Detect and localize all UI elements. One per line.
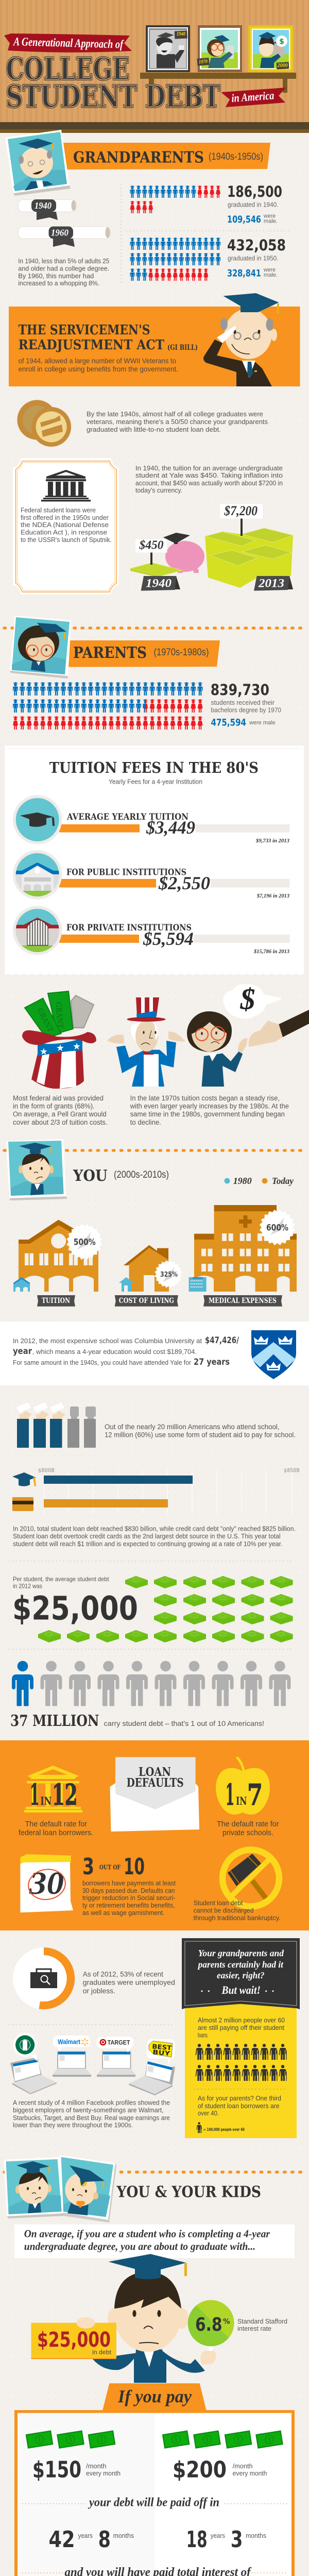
picture frame: 1940: 1940 — [177, 31, 185, 37]
illustration: grants in top hat — [22, 991, 96, 1089]
text: yale tuition: account, that $450 was actually worth about $7200 in — [135, 480, 283, 487]
legend: elder icon: = 100,000 people over 60 — [203, 2127, 245, 2132]
building: medical expenses: 600% — [266, 1223, 288, 1233]
icon: piggy bank with cap — [163, 533, 204, 573]
row: for private institutions: FOR PRIVATE INSTITUTIONS — [66, 923, 192, 933]
label: 1940 — [141, 576, 180, 591]
callout: on average: On average, if you are a student who is completing a 4-year — [24, 2228, 270, 2240]
text: student aid: Out of the nearly 20 million Americans who attend school, — [105, 1423, 280, 1431]
logo: target: TARGET — [108, 2039, 130, 2046]
text: college degree share: By 1960, this number had — [18, 273, 94, 280]
icon: no gavel bankruptcy: Student loan debt — [194, 1900, 243, 1907]
stat: 186,500: 186,500 — [227, 183, 282, 200]
building: tuition: 500% — [74, 1238, 96, 1248]
stat: 432,058: male. — [264, 272, 278, 278]
money stack: 2013: $7,200 — [224, 503, 258, 518]
stat: 1 in 12 federal: IN — [40, 1794, 52, 1807]
icon: credit card — [12, 1497, 33, 1511]
stat: 3 out of 10: OUT OF — [99, 1864, 121, 1871]
heading banner: (1940s-1950s) — [209, 151, 263, 162]
illustration: uncle sam — [107, 997, 185, 1087]
title: COLLEGE — [6, 52, 130, 87]
legend: 1980 — [233, 1176, 252, 1186]
text: ndea: first offered in the 1950s under — [21, 514, 109, 521]
panel: but wait callout — [182, 1938, 300, 2138]
bar chart: student debt vs credit cards: $850B — [284, 1467, 300, 1474]
panel: servicemen's readjustment act — [9, 293, 300, 386]
stat: 432,058: were — [263, 267, 276, 273]
text: yale tuition: In 1940, the tuition for an average undergraduate — [135, 465, 283, 472]
text: college degree share: increased to a whopping 8%. — [18, 280, 99, 287]
stat: 186,500: graduated in 1940. — [228, 201, 278, 208]
text: veterans — [87, 410, 268, 433]
stat: 1 in 12 federal: federal loan borrowers. — [19, 1828, 93, 1837]
label: 2013 — [254, 576, 293, 591]
illustration: raised hands with envelopes — [16, 1402, 96, 1448]
banner: a generational approach of: A Generational Approach of — [12, 35, 124, 51]
text: unemployed graduates: or jobless. — [83, 1987, 115, 1995]
building: cost of living — [119, 1245, 182, 1292]
money stack: 2013 — [205, 503, 293, 588]
text: biggest employers: lower than they were throughout the 1900s. — [13, 2121, 133, 2129]
text: certainly had it easier: easier, right? — [217, 1970, 265, 1980]
logo: best buy — [147, 2039, 175, 2066]
banner: in america — [221, 88, 286, 107]
stat: 839,730: students received their — [211, 699, 274, 706]
photo: you — [4, 2157, 64, 2218]
icon: briefcase — [30, 1969, 57, 1988]
text: unemployed graduates: graduates were unemployed — [83, 1978, 175, 1987]
heading — [49, 759, 259, 785]
illustration: worried parent with thought bubble — [187, 982, 309, 1087]
text: parents over 40: over 40. — [198, 2109, 219, 2117]
illustration: grants in top hat: ★ — [40, 1046, 48, 1057]
text: college degree share: In 1940, less than 5% of adults 25 — [18, 258, 109, 265]
logo: best buy: BEST — [152, 2043, 173, 2052]
heading: Yearly Fees for a 4-year Institution — [109, 778, 202, 785]
banner: in america: in America — [231, 89, 274, 105]
stat: 3 out of 10: 30 days passed due. Defaults can — [82, 1887, 175, 1894]
stat: average debt $25,000: $25,000 — [12, 1590, 138, 1627]
text: yale tuition: student at Yale was $450. Taking inflation into — [135, 472, 283, 479]
stat: 37 million: 37 MILLION — [10, 1712, 99, 1730]
stat: 839,730: bachelors degree by 1970 — [211, 707, 281, 714]
stat: 1 in 7 private: IN — [236, 1794, 247, 1807]
scroll: 1940 — [18, 199, 76, 220]
heading: YOU & YOUR KIDS — [116, 2183, 261, 2201]
photo: baby — [59, 2155, 116, 2223]
text: total student debt: Student loan debt overtook credit cards as the 2nd largest debt source in the U.S. This year total — [13, 1533, 281, 1540]
text: of 1944 — [19, 357, 178, 373]
panel: repayment comparison — [14, 2410, 295, 2576]
row: for public institutions: $7,196 in 2013 — [256, 893, 289, 899]
text: certainly had it easier — [197, 1948, 284, 1996]
icon: no gavel bankruptcy: through traditional bankruptcy. — [194, 1914, 281, 1922]
text: tuition rise — [130, 1094, 289, 1126]
laptop 4 — [129, 2060, 175, 2095]
stat: 18 years 3 months: years — [211, 2532, 225, 2539]
text: of 1944: enroll in college using benefits from the government. — [19, 365, 178, 373]
text: certainly had it easier: parents certainly had it — [197, 1959, 284, 1970]
stat: 3 out of 10: borrowers have payments at least — [82, 1879, 176, 1887]
pictogram: 1970 graduates — [13, 682, 203, 730]
text: biggest employers: Starbucks, Target, and Best Buy. Real wage earnings are — [13, 2114, 170, 2122]
paddle: 6.8% — [188, 2300, 234, 2365]
thought bubble: $ — [240, 982, 255, 1016]
stat: $150 per month: every month — [86, 2469, 121, 2477]
logo: walmart: Walmart — [58, 2038, 81, 2045]
stat: $150 per month: /month — [86, 2462, 107, 2470]
text: student aid: 12 million (60%) use some form of student aid to pay for school. — [105, 1431, 296, 1439]
building: cost of living: 325% — [160, 1271, 178, 1279]
label: 1940: 1940 — [146, 577, 172, 590]
text: people over 60: are still paying off their student — [198, 2024, 284, 2031]
panel: columbia university — [0, 1321, 309, 1385]
label: cost of living — [115, 1295, 178, 1307]
row: for private institutions: $15,786 in 2013 — [253, 949, 289, 955]
stat: 839,730: 475,594 — [211, 717, 246, 728]
text: total student debt: In 2010, total student loan debt reached $830 billion, while credit card debt "only" reached $825 billion. — [13, 1526, 296, 1533]
text: biggest employers: biggest employers of twenty-somethings are Walmart, — [13, 2106, 164, 2114]
illustration: saluting grandfather — [203, 293, 279, 386]
heading — [73, 1167, 169, 1185]
legend: Today — [272, 1176, 294, 1186]
illustration: employers and laptops — [10, 2033, 175, 2095]
logo: best buy: BUY — [152, 2048, 170, 2057]
picture frame: 2000: 2000 — [277, 63, 288, 69]
icon: no gavel bankruptcy: cannot be discharged — [194, 1907, 254, 1914]
stat: average debt $25,000: Per student, the average student debt — [13, 1575, 109, 1583]
heading: READJUSTMENT ACT — [19, 337, 165, 353]
text: federal aid: in the form of grants (68%). — [13, 1103, 95, 1110]
row: average yearly tuition — [13, 795, 290, 844]
picture frame: 2000: $ — [279, 38, 284, 46]
text: of 1944: of 1944, allowed a large number of WWII Veterans to — [19, 357, 176, 365]
text: tuition rise: with even larger yearly increases by the 1980s. At the — [130, 1103, 289, 1110]
panel: header — [0, 0, 309, 133]
picture frame: 1970 — [197, 25, 242, 72]
pictogram: 1950 graduates — [130, 238, 220, 281]
illustration: grants in top hat: GRANT — [54, 1002, 65, 1029]
title — [6, 52, 220, 114]
text: yale tuition — [135, 465, 283, 494]
photo: you — [6, 1139, 67, 1200]
legend — [225, 1176, 294, 1186]
stat: 1 in 7 private: 1 — [226, 1778, 234, 1812]
paddle: 6.8%: % — [223, 2317, 230, 2326]
stat: 1 in 7 private: 7 — [247, 1778, 263, 1812]
heading: (2000s-2010s) — [114, 1170, 169, 1180]
row: for public institutions: FOR PUBLIC INSTITUTIONS — [66, 867, 186, 877]
text: veterans: graduated with little-to-no student loan debt. — [87, 426, 221, 433]
text: ndea: Federal student loans were — [21, 507, 96, 514]
row: average yearly tuition: $9,733 in 2013 — [255, 838, 289, 844]
money stack: 1940: $450 — [139, 539, 164, 552]
icon: no gavel bankruptcy — [194, 1850, 281, 1922]
heading banner: PARENTS — [73, 644, 147, 662]
icon: broken credit card coins — [17, 400, 71, 447]
stat: $150 per month: $150 — [32, 2456, 81, 2483]
row: average yearly tuition: $3,449 — [146, 817, 195, 838]
icon: temple — [41, 470, 91, 502]
picture frame: 2000 — [248, 25, 294, 72]
logo: walmart — [53, 2036, 90, 2052]
text: biggest employers — [13, 2099, 170, 2129]
text: parents over 40: As for your parents? One third — [198, 2094, 281, 2102]
heading banner — [63, 143, 270, 170]
sign: $25,000 in debt — [31, 2317, 116, 2359]
illustration: grants in top hat: ★ — [56, 1043, 64, 1054]
stat: 432,058 — [227, 236, 286, 279]
stat: 1 in 7 private: private schools. — [222, 1828, 273, 1837]
chart: 53% donut unemployed — [13, 1947, 75, 2009]
building: medical expenses — [189, 1205, 297, 1292]
heading: THE SERVICEMEN'S — [19, 323, 150, 338]
stat: 3 out of 10: 3 — [82, 1854, 94, 1880]
text: student aid — [105, 1423, 296, 1439]
heading: TUITION FEES IN THE 80'S — [49, 759, 259, 776]
tab: if you pay: If you pay — [117, 2386, 192, 2406]
stat: 1 in 12 federal: 1 — [30, 1778, 39, 1812]
row: average yearly tuition: AVERAGE YEARLY TUITION — [66, 812, 188, 822]
row: for public institutions — [13, 850, 290, 902]
text: most expensive school: 27 years — [194, 1357, 230, 1367]
text: total student debt: student debt will reach $1 trillion and is expected to continuing growing at a rate of 10% per year. — [13, 1540, 282, 1548]
text: people over 60: loans. — [198, 2031, 209, 2039]
panel: tuition fees in the 80's — [5, 745, 304, 975]
text: parents over 40 — [198, 2094, 281, 2117]
icon: calendar day 30: 30 — [29, 1866, 64, 1901]
row: for private institutions: $5,594 — [143, 928, 194, 949]
panel: you — [4, 1139, 303, 1307]
callout: on average — [14, 2225, 295, 2258]
text: ndea: the NDEA (National Defense — [21, 521, 109, 529]
scroll: 1940: 1940 — [35, 200, 52, 211]
stat: 186,500: male. — [264, 218, 278, 225]
heading — [19, 323, 198, 353]
label: 2013: 2013 — [258, 577, 284, 590]
label: medical expenses: MEDICAL EXPENSES — [209, 1297, 277, 1305]
text: college degree share: and older had a college degree. — [18, 265, 109, 272]
scroll: 1960 — [18, 227, 110, 247]
bar chart: student debt vs credit cards: $800B — [38, 1467, 55, 1474]
stat: 432,058: graduated in 1950. — [228, 255, 278, 262]
stat: 42 years 8 months: years — [78, 2532, 93, 2539]
text: ndea: to the USSR's launch of Sputnik. — [21, 536, 112, 544]
stat: 37 million — [10, 1712, 264, 1730]
stat: 186,500: were — [263, 213, 276, 219]
stat: 42 years 8 months: 8 — [98, 2527, 111, 2553]
text: federal aid: On average, a Pell Grant would — [13, 1110, 107, 1118]
stat: 42 years 8 months — [48, 2527, 134, 2553]
text: veterans: veterans, meaning there's a 50/50 chance your grandparents — [87, 418, 268, 426]
stat: 1 in 12 federal — [19, 1766, 93, 1837]
icons: cash bills $200 — [162, 2430, 283, 2449]
stat: average debt $25,000 — [12, 1575, 138, 1627]
row: for private institutions — [13, 906, 290, 958]
stat: average debt $25,000: in 2012 was — [13, 1583, 42, 1590]
text: tuition rise: In the late 1970s tuition costs began a steady rise, — [130, 1094, 280, 1102]
laptop 1 — [10, 2057, 57, 2094]
text: most expensive school: In 2012, the most expensive school was Columbia University at — [13, 1337, 202, 1345]
scroll: 1960: 1960 — [51, 228, 68, 238]
sign: $25,000 in debt: $25,000 — [37, 2328, 111, 2352]
illustration: graduate with debt sign — [31, 2254, 234, 2383]
stat: 18 years 3 months: 3 — [231, 2527, 243, 2553]
illustration: grants in top hat: GRANT — [35, 1007, 55, 1034]
text: ndea — [21, 507, 112, 544]
text: biggest employers: A recent study of 4 million Facebook profiles showed the — [13, 2099, 170, 2107]
text: veterans: By the late 1940s, almost half of all college graduates were — [87, 410, 263, 418]
text: total student debt — [13, 1526, 296, 1548]
text: people over 60: Almost 2 million people over 60 — [198, 2016, 285, 2024]
text: most expensive school: year — [13, 1346, 32, 1357]
stat: 18 years 3 months: months — [246, 2532, 266, 2539]
label: medical expenses — [203, 1295, 282, 1307]
heading banner: GRANDPARENTS — [73, 149, 204, 167]
text: stafford rate: interest rate — [237, 2325, 271, 2332]
pictogram: money stacks — [38, 1576, 293, 1642]
stat: 839,730: 839,730 — [211, 681, 269, 699]
stat: 186,500 — [227, 183, 282, 225]
stat: 3 out of 10: trigger reduction in Social securi- — [82, 1894, 176, 1902]
photo: grandparent — [5, 130, 71, 196]
logo: starbucks — [13, 2033, 38, 2062]
stat: 37 million: carry student debt – that's 1 out of 10 Americans! — [104, 1719, 264, 1727]
picture frame: 1940 — [146, 25, 190, 72]
stat: $200 per month — [173, 2456, 267, 2483]
text: most expensive school: , which means a 4-year education would cost $189,704. — [32, 1348, 197, 1355]
icon: fist and sleeve — [249, 1010, 309, 1047]
picture frame: 1970: 1970 — [199, 59, 208, 65]
stat: $200 per month: /month — [233, 2462, 253, 2470]
pictogram: 1940 graduates — [130, 185, 220, 213]
stat: 1 in 7 private — [216, 1758, 279, 1837]
laptop 2 — [53, 2052, 91, 2077]
stat: 42 years 8 months: months — [113, 2532, 134, 2539]
stat: 1 in 12 federal: The default rate for — [25, 1820, 87, 1828]
stat: 1 in 12 federal: 12 — [52, 1778, 77, 1812]
stat: 18 years 3 months — [186, 2527, 266, 2553]
photo: parent — [10, 616, 71, 679]
text: stafford rate — [237, 2317, 287, 2332]
thought bubble — [223, 982, 283, 1019]
icon: columbia shield — [251, 1330, 296, 1379]
text: federal aid: Most federal aid was provided — [13, 1094, 104, 1102]
stat: 42 years 8 months: 42 — [48, 2527, 75, 2553]
label: tuition — [37, 1295, 75, 1307]
bar chart: student debt vs credit cards — [12, 1467, 300, 1514]
panel: federal student loans ticket — [13, 458, 119, 595]
money stack: 1940 — [130, 539, 182, 578]
laptop 3 — [97, 2052, 135, 2077]
illustration: grants in top hat: ★ — [73, 1041, 81, 1052]
stat: 839,730: were male — [249, 720, 276, 726]
stat: 432,058: 328,841 — [227, 268, 261, 279]
building: tuition — [13, 1220, 102, 1292]
title: STUDENT DEBT — [6, 79, 220, 114]
icon: envelope with letter: LOAN — [139, 1765, 171, 1779]
panel: you & your kids — [0, 2155, 309, 2576]
callout: on average: undergraduate degree, you are about to graduate with... — [24, 2240, 255, 2252]
stat: 3 out of 10: 10 — [124, 1854, 145, 1880]
text: ndea: Education Act ), in response — [21, 529, 107, 536]
stat: $200 per month: every month — [233, 2469, 267, 2477]
icon: cap — [12, 1472, 36, 1486]
text: most expensive school: For same amount in the 1940s, you could have attended Yale for — [13, 1359, 192, 1366]
icon: calendar day 30 — [20, 1854, 73, 1912]
stat: 186,500: 109,546 — [227, 214, 261, 225]
pictogram: elders — [196, 2044, 287, 2081]
heading: YOU — [73, 1167, 108, 1185]
icon: envelope with letter — [110, 1757, 199, 1832]
text: unemployed graduates: As of 2012, 53% of recent — [83, 1970, 163, 1978]
text: tuition rise: to decline. — [130, 1118, 161, 1126]
stat: 3 out of 10: ty or retirement benefits benefits, — [82, 1902, 175, 1909]
stat: 432,058: 432,058 — [227, 236, 286, 254]
row: for public institutions: $2,550 — [158, 873, 210, 893]
stat: 3 out of 10: as well as wage garnishment. — [82, 1909, 165, 1917]
heading banner: (1970s-1980s) — [153, 647, 209, 658]
graduation cap — [108, 2254, 187, 2279]
paddle: 6.8%: 6.8 — [195, 2314, 222, 2335]
stat: 18 years 3 months: 18 — [186, 2527, 208, 2553]
title: COLLEGE — [6, 52, 130, 87]
stat: 839,730 — [211, 681, 281, 728]
heading banner — [67, 640, 220, 667]
logo: target — [97, 2037, 133, 2053]
icons: cash bills $150 — [26, 2430, 115, 2449]
text: parents over 40: of student loan borrowers are — [198, 2102, 280, 2110]
stat: $200 per month: $200 — [173, 2456, 227, 2483]
label: cost of living: COST OF LIVING — [119, 1297, 174, 1305]
text: stafford rate: Standard Stafford — [237, 2317, 287, 2325]
text: people over 60 — [198, 2016, 285, 2039]
illustration: tuition money comparison — [130, 503, 293, 591]
panel: loan defaults — [0, 1740, 309, 1930]
label: tuition: TUITION — [42, 1297, 70, 1305]
sign: $25,000 in debt: in debt — [92, 2348, 112, 2355]
title: STUDENT DEBT — [6, 79, 220, 114]
pictogram: 1 in 10 people — [12, 1661, 290, 1706]
text: college degree share — [18, 258, 109, 287]
shelf — [140, 73, 296, 93]
panel: parents — [4, 616, 303, 730]
stat: 3 out of 10 — [82, 1854, 176, 1917]
tab: if you pay — [102, 2383, 207, 2411]
text: certainly had it easier: Your grandparents and — [198, 1948, 284, 1958]
panel: grandparents — [5, 130, 291, 287]
text: federal aid — [13, 1094, 108, 1126]
text: certainly had it easier: But wait! — [221, 1984, 261, 1996]
text: tuition rise: same time in the 1980s, government funding began — [130, 1110, 285, 1118]
text: federal aid: cover about 2/3 of tuition costs. — [13, 1118, 108, 1126]
text: most expensive school: $47,426/ — [205, 1335, 239, 1346]
stat: 1 in 7 private: The default rate for — [217, 1820, 279, 1828]
legend: elder icon — [197, 2122, 245, 2133]
text: most expensive school — [13, 1335, 239, 1367]
text: yale tuition: today's currency. — [135, 487, 182, 494]
subheading: debt paid off in: your debt will be paid off in — [88, 2496, 219, 2510]
text: unemployed graduates — [83, 1970, 175, 1995]
icon: envelope with letter: DEFAULTS — [127, 1776, 184, 1790]
heading: (GI BILL) — [167, 344, 198, 352]
